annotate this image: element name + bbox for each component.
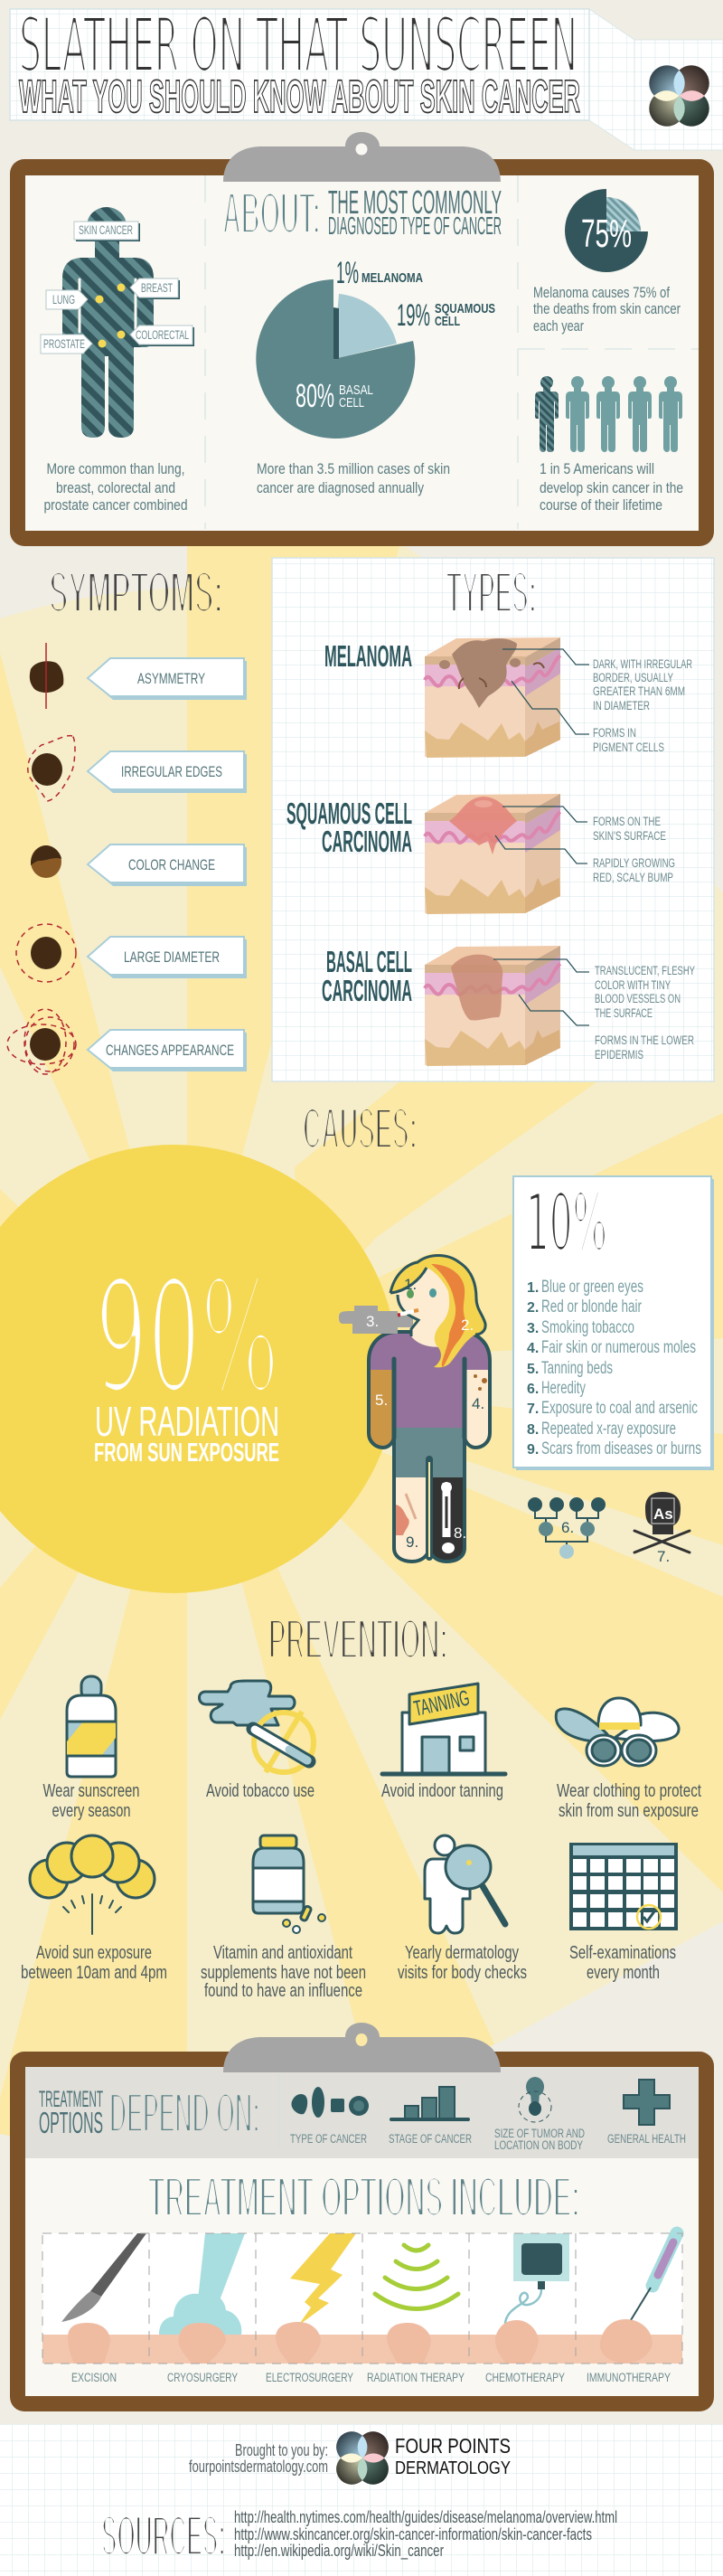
tag: lung: [46, 290, 88, 309]
text: more common: More common than lung,: [47, 460, 184, 477]
list of causes: 3.: [527, 1321, 539, 1336]
symptom: changes appearance: [7, 1009, 247, 1074]
type: squamous cell carcinoma: [286, 794, 675, 914]
type: basal cell carcinoma: BASAL CELL: [326, 945, 412, 978]
icon: arsenic skull: [634, 1492, 690, 1565]
label 80%: CELL: [339, 395, 364, 410]
body figure: [41, 207, 194, 438]
text: vitamin: [201, 1943, 366, 2001]
icon: logo: [649, 65, 709, 127]
panel: about clipboard: THE MOST COMMONLY: [328, 184, 502, 221]
text: self exam: Self-examinations: [569, 1943, 676, 1963]
pie chart: [256, 256, 495, 439]
clipboard clip: [223, 2023, 501, 2072]
icon: arsenic skull: As: [653, 1505, 673, 1523]
type: squamous cell carcinoma: FORMS ON THE: [593, 815, 661, 828]
text: one in five: course of their lifetime: [540, 496, 662, 514]
icon: footer logo: [336, 2431, 389, 2485]
number labels: [366, 1276, 484, 1551]
text: avoid tobacco: Avoid tobacco use: [206, 1781, 315, 1801]
text: vitamin: Vitamin and antioxidant: [213, 1943, 352, 1963]
symptom: changes appearance: CHANGES APPEARANCE: [106, 1042, 234, 1059]
type: melanoma: MELANOMA: [324, 639, 412, 673]
text: four points dermatology: [395, 2434, 511, 2478]
text: 90 percent: 90%: [95, 1246, 279, 1430]
tag: colorectal: COLORECTAL: [136, 328, 189, 342]
text: source links: [234, 2508, 617, 2561]
text: brought to you by: [189, 2441, 328, 2476]
text: brought to you by: Brought to you by:: [235, 2441, 328, 2459]
heading: treatment options depend on: [39, 2080, 260, 2146]
label 1%: 1%: [336, 256, 359, 290]
text: wear clothing: [557, 1781, 701, 1821]
text: yearly: Yearly dermatology: [405, 1943, 519, 1963]
icon: heredity tree: [528, 1497, 606, 1559]
text: SYMPTOMS:: [49, 559, 223, 627]
type: melanoma: PIGMENT CELLS: [593, 741, 664, 754]
face: [398, 1261, 461, 1347]
icon: heredity tree: 6.: [561, 1519, 574, 1536]
number labels: 1.: [404, 1276, 417, 1293]
text: melanoma causes: the deaths from skin cancer: [533, 300, 681, 317]
label 1%: [336, 256, 423, 290]
icon: size of tumor: SIZE OF TUMOR AND: [494, 2127, 585, 2140]
icon: stage of cancer: [389, 2087, 472, 2146]
type: basal cell carcinoma: EPIDERMIS: [595, 1048, 643, 1062]
heading: treatment options depend on: TREATMENT: [39, 2087, 103, 2112]
hair: [390, 1255, 485, 1367]
footer panel: SOURCES:: [101, 2502, 226, 2569]
text: 3.5 million: cancer are diagnosed annually: [257, 479, 424, 496]
tag: prostate: [41, 335, 92, 354]
panel: treatment clipboard: DEPEND ON:: [109, 2080, 260, 2146]
list of causes: Red or blonde hair: [541, 1297, 642, 1316]
tool: electrosurgery bolt: [290, 2233, 356, 2326]
text: 3.5 million: More than 3.5 million cases of skin: [257, 460, 450, 477]
treatment labels: IMMUNOTHERAPY: [587, 2371, 671, 2384]
text: more common: prostate cancer combined: [43, 496, 188, 514]
tool: chemotherapy bag: [505, 2233, 569, 2324]
symptom: color change: [31, 845, 247, 886]
list of causes: 9.: [527, 1442, 539, 1458]
treatment labels: CRYOSURGERY: [167, 2371, 238, 2384]
number labels: 2.: [461, 1316, 474, 1334]
treatment labels: CHEMOTHERAPY: [485, 2371, 565, 2384]
text: one in five: develop skin cancer in the: [540, 479, 683, 496]
list of causes: 8.: [527, 1422, 539, 1438]
symptom: large diameter: [16, 924, 247, 982]
number labels: 4.: [472, 1395, 484, 1412]
list of causes: 4.: [527, 1341, 539, 1356]
label 80%: BASAL: [339, 382, 373, 398]
skin band: [42, 2319, 682, 2364]
list of causes: Smoking tobacco: [541, 1318, 634, 1337]
label 19%: [397, 298, 495, 333]
icon: hat and sunglasses: [556, 1698, 679, 1766]
sun circle: [0, 1145, 398, 1593]
type: basal cell carcinoma: COLOR WITH TINY: [595, 978, 671, 992]
type: melanoma: BORDER, USUALLY: [593, 671, 673, 684]
icon: tanning building: TANNING: [412, 1686, 472, 1722]
list of causes: Tanning beds: [541, 1359, 613, 1378]
type: squamous cell carcinoma: RED, SCALY BUMP: [593, 871, 673, 884]
symptom: irregular edges: [28, 736, 247, 801]
list of causes: 5.: [527, 1362, 539, 1377]
clipboard clip: [223, 132, 501, 182]
text: one in five: [540, 460, 683, 514]
icon: type of cancer: [290, 2087, 369, 2146]
number labels: 3.: [366, 1313, 379, 1330]
tag: skin cancer: SKIN CANCER: [79, 223, 133, 237]
type: squamous cell carcinoma: SKIN'S SURFACE: [593, 829, 666, 843]
treatment illustration strip: [42, 2233, 682, 2364]
text: 3.5 million: [257, 460, 450, 496]
treatment labels: RADIATION THERAPY: [367, 2371, 465, 2384]
tag: breast: [130, 278, 180, 299]
list of causes: 2.: [527, 1300, 539, 1316]
text: source links: http://www.skincancer.org/skin-cancer-information/skin-cancer-facts: [234, 2525, 592, 2543]
sun rays: [0, 546, 723, 2136]
label 19%: 19%: [397, 298, 430, 333]
symptom: large diameter: LARGE DIAMETER: [124, 948, 220, 966]
text: melanoma causes: each year: [533, 317, 584, 335]
type: squamous cell carcinoma: SQUAMOUS CELL: [286, 797, 412, 830]
list of causes: Blue or green eyes: [541, 1278, 643, 1297]
text: self exam: every month: [587, 1963, 660, 1983]
icon: tanning building: [382, 1684, 505, 1774]
figure: person with causes: [339, 1255, 493, 1563]
number labels: 8.: [454, 1524, 466, 1542]
panel: about clipboard: [10, 132, 714, 546]
icon: body check magnifier: [425, 1835, 505, 1933]
text: yearly: visits for body checks: [398, 1963, 527, 1983]
label 1%: MELANOMA: [362, 270, 423, 286]
chart: 75 percent: [565, 189, 648, 272]
type: melanoma: IN DIAMETER: [593, 699, 650, 712]
list of causes: 7.: [527, 1401, 539, 1417]
icon: balloons sun: [30, 1835, 155, 1934]
list of causes: 1.: [527, 1280, 539, 1296]
list of causes: Heredity: [541, 1379, 586, 1398]
icon: calendar: [569, 1843, 678, 1930]
panel: types: TYPES:: [446, 559, 537, 627]
icon: type of cancer: TYPE OF CANCER: [290, 2132, 367, 2146]
heading: treatment options depend on: OPTIONS: [39, 2106, 103, 2139]
icon: size of tumor: LOCATION ON BODY: [494, 2138, 583, 2152]
text: wear sunscreen: [43, 1781, 139, 1821]
type: basal cell carcinoma: BLOOD VESSELS ON: [595, 992, 681, 1005]
type: squamous cell carcinoma: CARCINOMA: [322, 825, 412, 858]
tool: cryosurgery spray: [159, 2233, 245, 2335]
text: more common: [43, 460, 188, 514]
text: CAUSES:: [303, 1095, 418, 1163]
icon: general health: GENERAL HEALTH: [607, 2132, 686, 2146]
text: avoid sun: between 10am and 4pm: [21, 1963, 167, 1983]
list of causes: [527, 1278, 701, 1458]
icon: size of tumor: [494, 2077, 585, 2152]
panel: ten percent causes: 10%: [526, 1176, 607, 1269]
panel: about clipboard: DIAGNOSED TYPE OF CANCER: [328, 212, 502, 240]
type: melanoma: [324, 637, 692, 758]
label 19%: SQUAMOUS: [435, 301, 495, 316]
list of causes: 6.: [527, 1382, 539, 1397]
type: melanoma: GREATER THAN 6MM: [593, 684, 685, 698]
text: more common: breast, colorectal and: [56, 479, 175, 496]
label 80%: 80%: [296, 377, 334, 414]
tool: immunotherapy syringe: [631, 2233, 677, 2320]
text: vitamin: supplements have not been: [201, 1963, 366, 1983]
icon: arsenic skull: 7.: [657, 1548, 670, 1565]
icon: vitamin bottle: [253, 1835, 325, 1933]
icon: no tobacco: [199, 1681, 314, 1772]
text: one in five: 1 in 5 Americans will: [540, 460, 654, 477]
tool: radiation arcs: [375, 2245, 458, 2309]
tag: colorectal: [130, 326, 194, 346]
text: melanoma causes: Melanoma causes 75% of: [533, 284, 670, 301]
icon: stage of cancer: STAGE OF CANCER: [389, 2132, 472, 2146]
text: wear sunscreen: every season: [52, 1801, 130, 1821]
treatment labels: ELECTROSURGERY: [266, 2371, 353, 2384]
icon: general health: [607, 2080, 686, 2146]
text: from sun exposure: FROM SUN EXPOSURE: [94, 1439, 279, 1467]
panel: ten percent causes: [513, 1176, 714, 1470]
panel: about clipboard: ABOUT:: [222, 179, 321, 248]
symptom: color change: COLOR CHANGE: [128, 856, 215, 873]
text: vitamin: found to have an influence: [204, 1981, 362, 2001]
treatment labels: EXCISION: [71, 2371, 117, 2384]
text: avoid sun: [21, 1943, 167, 1983]
text: four points dermatology: DERMATOLOGY: [395, 2458, 511, 2478]
type: basal cell carcinoma: CARCINOMA: [322, 974, 412, 1007]
text: self exam: [569, 1943, 676, 1983]
text: source links: http://en.wikipedia.org/wiki/Skin_cancer: [234, 2542, 444, 2561]
symptom: asymmetry: [30, 643, 247, 709]
type: basal cell carcinoma: [322, 945, 695, 1066]
tag: prostate: PROSTATE: [43, 337, 85, 351]
text: brought to you by: fourpointsdermatology.com: [189, 2458, 328, 2476]
text: PREVENTION:: [268, 1606, 448, 1672]
panel: treatment clipboard: [10, 2023, 714, 2411]
number labels: 5.: [375, 1392, 388, 1409]
header panel: [10, 1, 723, 150]
icon: five people: [535, 376, 682, 452]
type: melanoma: FORMS IN: [593, 726, 636, 740]
type: basal cell carcinoma: THE SURFACE: [595, 1006, 653, 1020]
symptom: asymmetry: ASYMMETRY: [137, 670, 205, 687]
panel: types: [272, 558, 714, 1081]
text: melanoma causes: [533, 284, 681, 335]
tag: lung: LUNG: [52, 293, 75, 307]
tag: skin cancer: [74, 222, 140, 241]
tool: scalpel: [61, 2233, 146, 2322]
text: avoid indoor tanning: Avoid indoor tanning: [381, 1781, 503, 1801]
symptom: irregular edges: IRREGULAR EDGES: [121, 763, 222, 780]
smoke: [339, 1306, 413, 1334]
footer panel: [0, 2424, 723, 2576]
tag: breast: BREAST: [141, 281, 173, 295]
treatment labels: [71, 2371, 671, 2384]
icon: sunscreen bottle: [67, 1676, 116, 1777]
chart: 75 percent: 75%: [581, 212, 632, 256]
text: avoid sun: Avoid sun exposure: [36, 1943, 152, 1963]
text: wear sunscreen: Wear sunscreen: [43, 1781, 139, 1801]
type: squamous cell carcinoma: RAPIDLY GROWING: [593, 856, 675, 870]
text: uv radiation: UV RADIATION: [95, 1398, 279, 1445]
number labels: 9.: [406, 1533, 418, 1551]
label 19%: CELL: [435, 314, 460, 329]
text: four points dermatology: FOUR POINTS: [395, 2434, 511, 2458]
text: yearly: [398, 1943, 527, 1983]
